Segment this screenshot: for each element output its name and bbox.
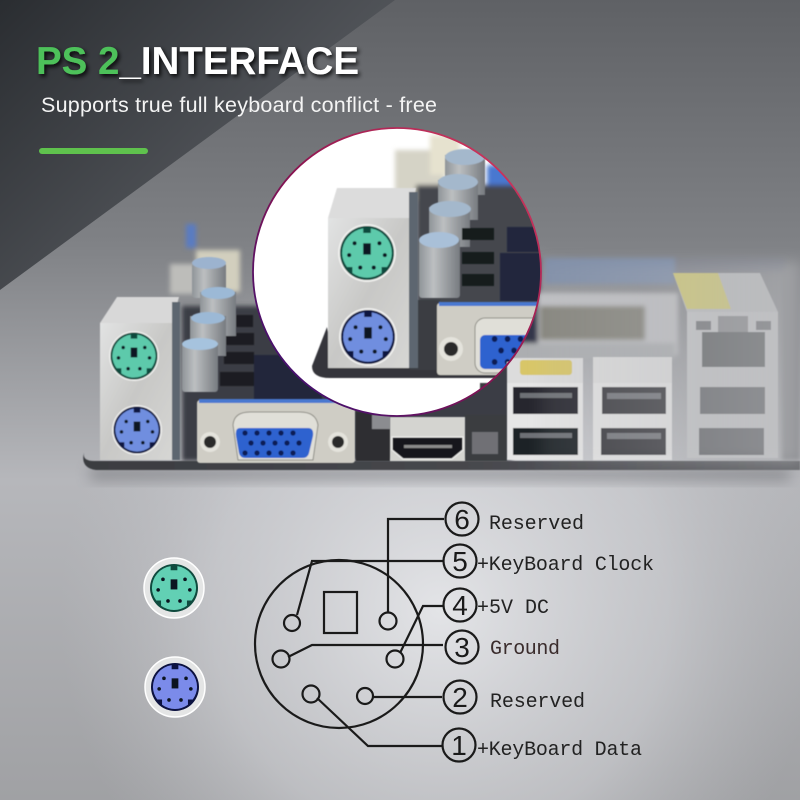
board reflection	[90, 468, 790, 480]
pin numbers: 1	[451, 730, 467, 761]
board edge	[83, 425, 800, 470]
pin labels: Reserved	[489, 513, 584, 536]
USB stack 1	[507, 358, 583, 460]
key slot	[324, 592, 357, 633]
subtitle: Supports true full keyboard conflict - free	[41, 93, 437, 117]
pin numbers: 2	[452, 682, 468, 713]
VGA connector	[197, 399, 355, 463]
lens rear circuitry	[395, 135, 546, 310]
right side fade	[540, 262, 800, 462]
pin labels: +5V DC	[477, 597, 549, 620]
RJ45 and USB stack	[673, 273, 778, 458]
title: PS 2_INTERFACE	[36, 40, 359, 83]
lens capacitors	[445, 155, 485, 195]
lens port cage	[328, 188, 416, 218]
USB stack 2	[593, 357, 672, 460]
pin labels: Reserved	[490, 691, 585, 714]
magnifier lens	[253, 128, 556, 422]
motherboard photo	[83, 224, 800, 480]
icon: green PS/2 port	[144, 558, 204, 618]
blurred rear circuitry	[170, 224, 800, 461]
pin labels: +KeyBoard Data	[477, 739, 642, 762]
lens VGA connector	[437, 303, 547, 375]
numbered pin badges	[442, 502, 478, 762]
PS/2 port cage	[100, 297, 180, 460]
pin numbers: 4	[452, 590, 468, 621]
pin labels: +KeyBoard Clock	[477, 554, 654, 577]
pin numbers: 3	[454, 632, 470, 663]
pin labels	[477, 513, 654, 762]
green PS/2 port	[109, 331, 159, 381]
pinout diagram	[255, 502, 478, 762]
green accent bar	[39, 148, 148, 154]
pin numbers: 6	[454, 504, 470, 535]
connector outline	[255, 560, 423, 728]
pin leader lines	[288, 519, 444, 746]
lens lower parts	[506, 361, 509, 364]
icon: blue PS/2 port	[145, 657, 205, 717]
lens board edge	[312, 327, 520, 378]
blue PS/2 port	[112, 405, 162, 455]
pin numbers	[451, 504, 470, 761]
small components	[356, 412, 507, 461]
rear board shadow	[182, 306, 512, 461]
pin holes	[272, 612, 404, 704]
pin numbers: 5	[452, 546, 468, 577]
capacitors and chokes	[182, 257, 322, 405]
pin labels: Ground	[490, 638, 560, 661]
HDMI connector	[390, 417, 465, 461]
